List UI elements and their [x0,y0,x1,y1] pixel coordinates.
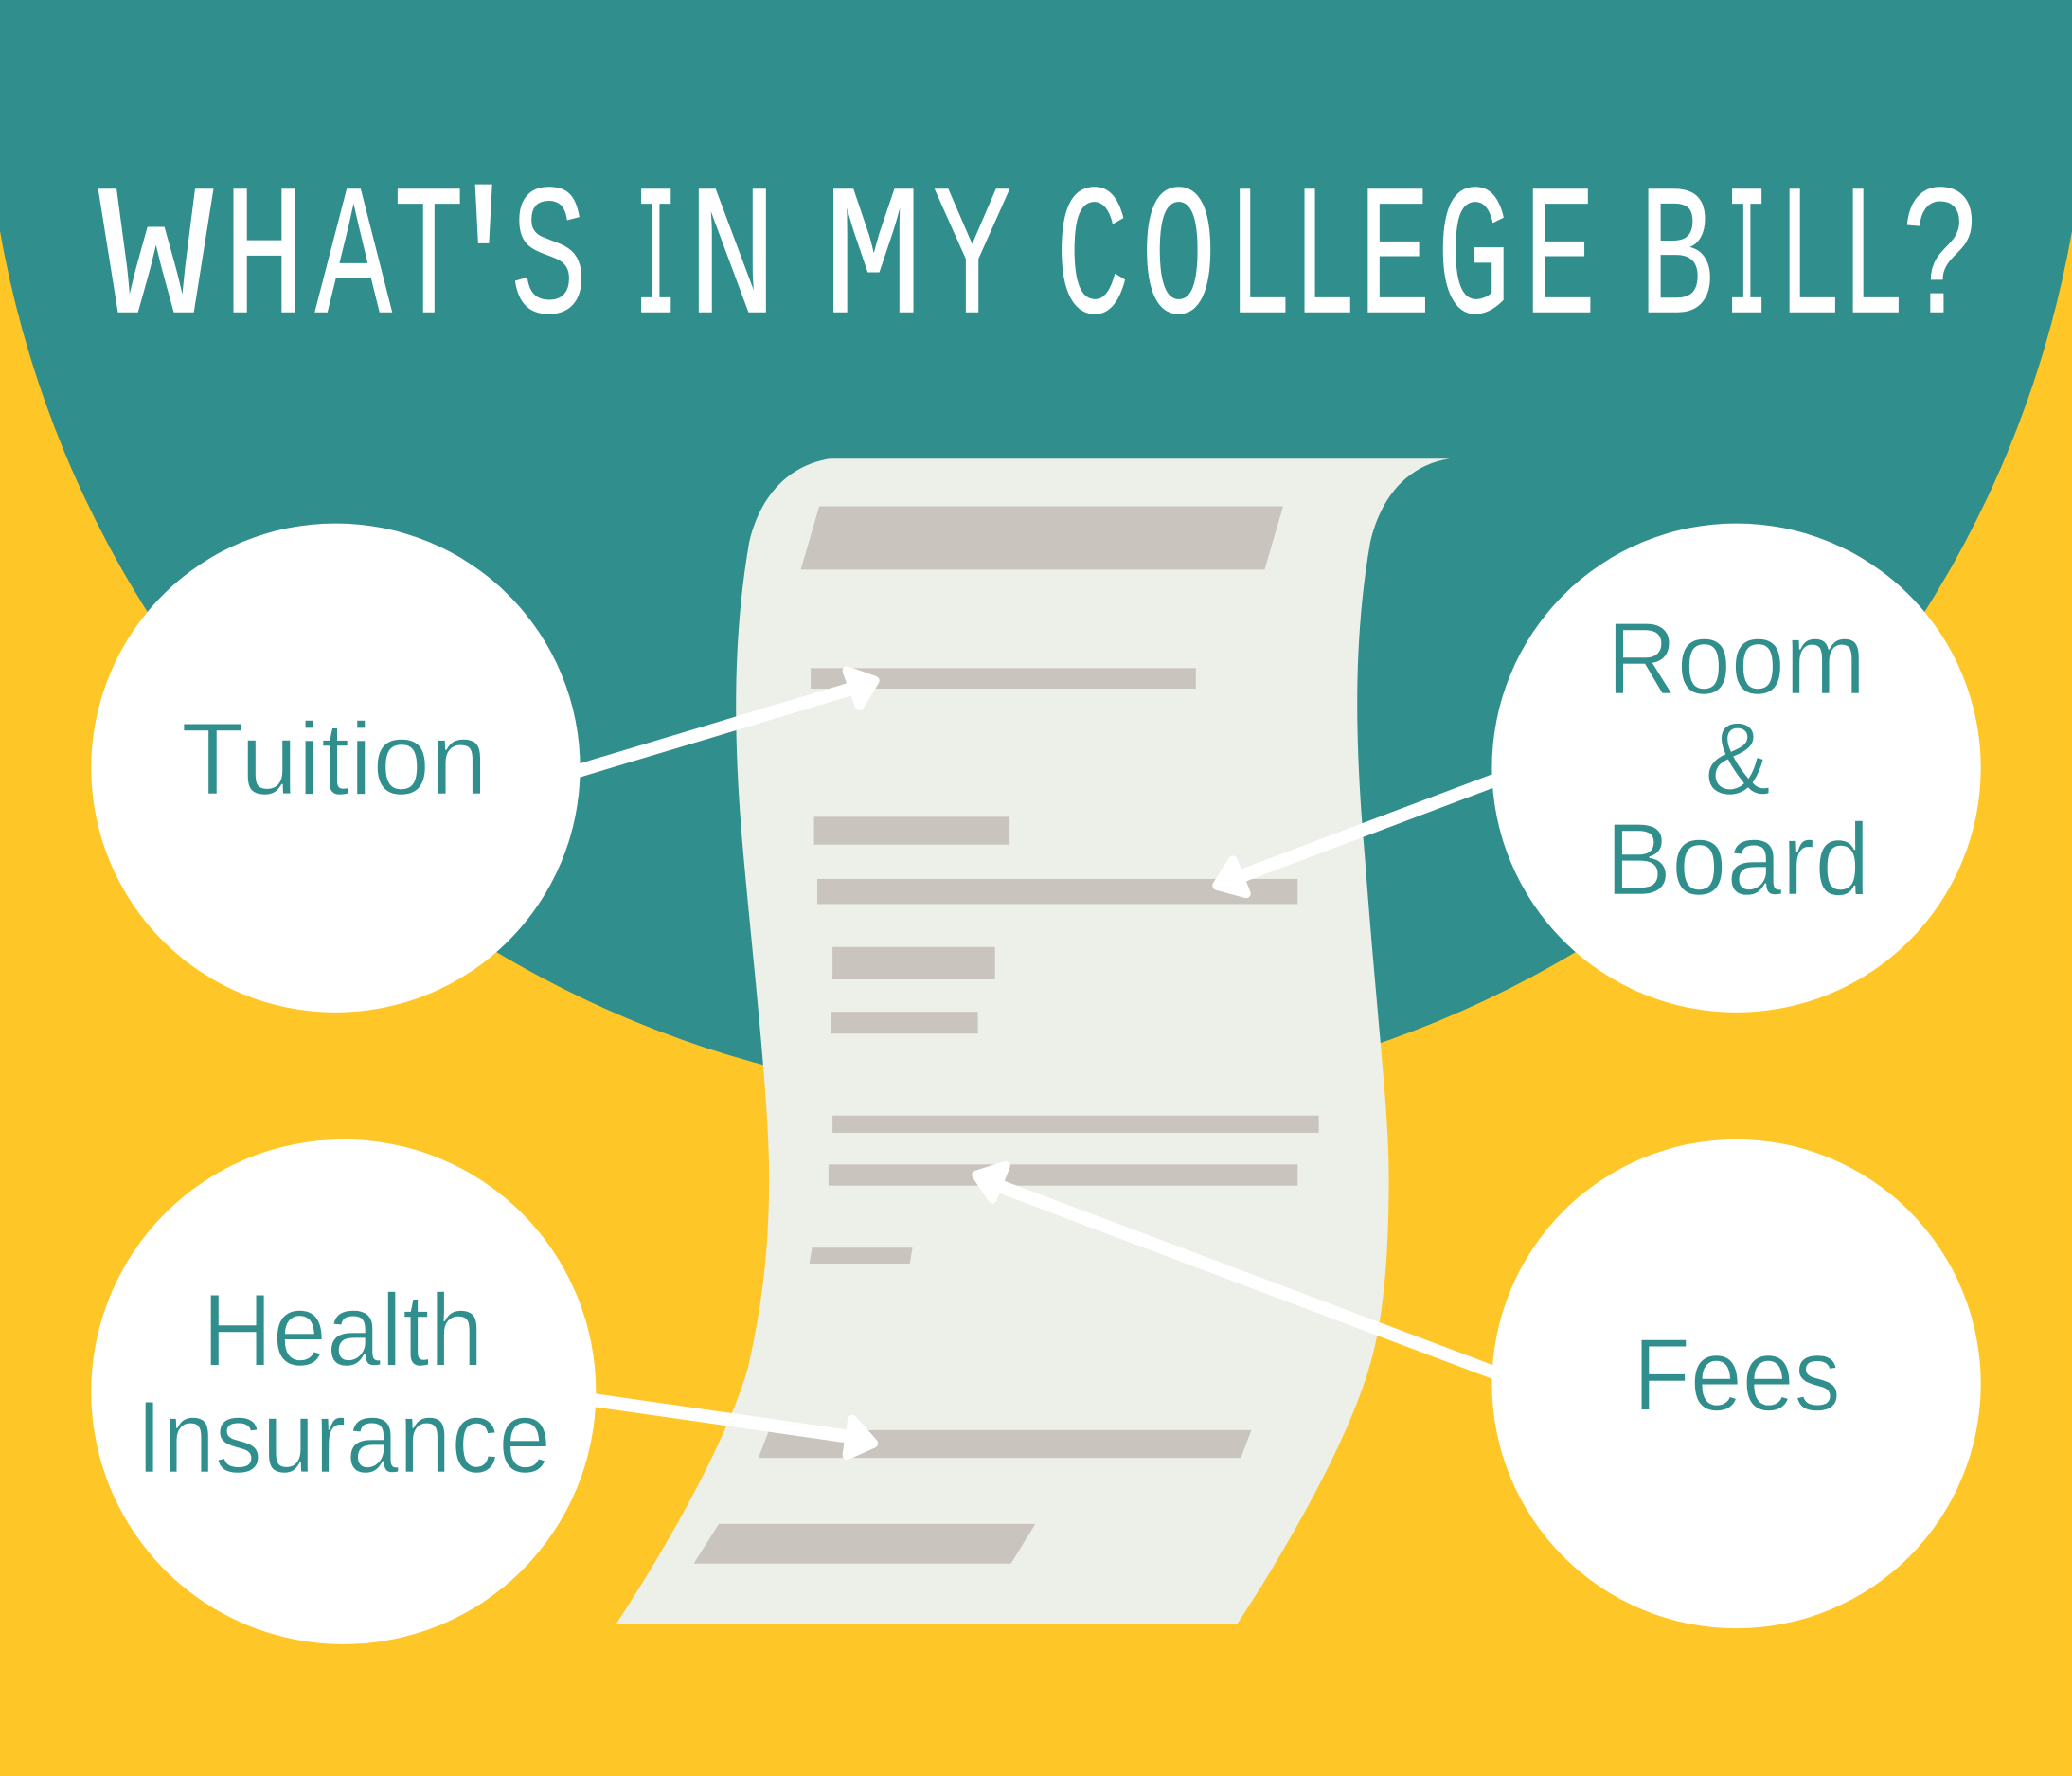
circle: fees [1491,1139,1981,1628]
title: Y [933,157,1011,368]
title: W [98,157,213,368]
title: I [1725,157,1769,368]
label: health insurance [136,1272,551,1495]
receipt paper [616,458,1450,1624]
label: room and board [1605,601,1869,918]
receipt / college bill [616,458,1450,1624]
title: L [1841,157,1905,368]
title: T [394,157,464,368]
title: M [823,157,923,368]
arrow: health insurance to bill [581,1398,873,1455]
arrow: tuition to bill [568,671,875,774]
teal semicircle backdrop [0,0,2072,1101]
title: A [315,157,392,368]
label: room and board: & [1705,702,1771,817]
title: ? [1902,157,1982,368]
title: E [1358,157,1431,368]
title: S [510,157,587,368]
circle: room and board [1491,524,1981,1013]
label: fees: Fees [1634,1318,1841,1433]
title: I [634,157,678,368]
circle: tuition [91,524,581,1013]
circle: health insurance [91,1139,596,1644]
title: O [1141,157,1217,368]
label: room and board: Room [1607,601,1866,717]
arrow: fees to bill [976,1166,1507,1377]
title: L [1227,157,1292,368]
title: C [1055,157,1130,368]
title: ' [438,166,528,377]
title: L [1293,157,1357,368]
label: tuition: Tuition [181,702,488,817]
title: N [688,157,777,368]
label: health insurance: Health [203,1272,484,1388]
title: G [1437,157,1511,368]
title: B [1638,157,1715,368]
title: L [1777,157,1842,368]
title: E [1524,157,1597,368]
label: room and board: Board [1605,802,1869,918]
label: health insurance: Insurance [136,1379,551,1495]
title: H [223,157,306,368]
receipt line items [694,506,1319,1564]
arrow: room and board to bill [1217,776,1507,893]
